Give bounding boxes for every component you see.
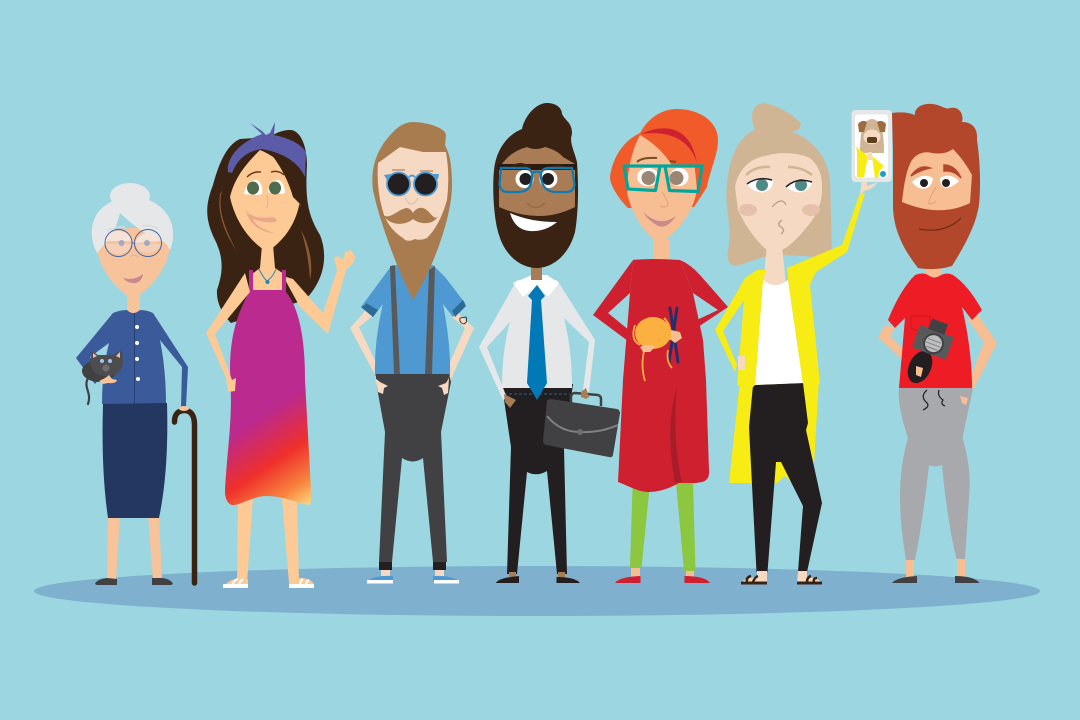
shirt and arms	[479, 280, 595, 400]
nose	[929, 187, 936, 204]
phone with selfie preview	[852, 110, 892, 182]
nose	[130, 255, 138, 257]
neck and chest	[252, 245, 284, 292]
sandals	[741, 576, 822, 584]
sneakers	[367, 576, 459, 581]
dress fold	[670, 387, 682, 483]
hair over forehead	[268, 150, 301, 205]
hair and beard	[493, 103, 578, 268]
eyebrows	[746, 167, 812, 175]
mustache	[383, 208, 438, 224]
shoes	[95, 578, 173, 585]
neck	[127, 296, 140, 316]
hair	[207, 130, 324, 323]
knitting needles	[669, 308, 678, 362]
hand on strap	[916, 366, 923, 377]
red dress	[618, 259, 709, 492]
collar	[513, 275, 559, 297]
eyebrows	[247, 171, 284, 177]
feet	[741, 571, 822, 582]
head	[97, 228, 170, 300]
eyes	[912, 176, 959, 189]
briefcase	[543, 393, 620, 457]
ankles	[509, 572, 565, 578]
eyes	[244, 180, 285, 195]
white top	[755, 280, 803, 385]
smile	[919, 218, 961, 230]
hair bun	[110, 183, 150, 209]
trousers	[376, 374, 451, 562]
sweat pants	[899, 388, 973, 560]
suspenders	[390, 266, 435, 375]
neck	[531, 264, 542, 280]
eyes	[516, 170, 558, 188]
left arm	[206, 273, 250, 392]
eyebrows	[637, 158, 676, 162]
dark brow bar	[498, 164, 577, 170]
sandals	[223, 578, 314, 588]
glasses	[105, 230, 162, 256]
trouser cuffs	[379, 562, 446, 570]
necklace	[259, 269, 276, 281]
ankles	[381, 570, 444, 576]
character: grandmother with cat and cane	[76, 183, 194, 585]
face	[378, 147, 448, 241]
hair red streak	[641, 128, 697, 163]
nose	[527, 203, 545, 208]
tie	[527, 285, 547, 400]
yarn ball	[633, 317, 672, 381]
hair and beard	[892, 104, 980, 269]
cane	[174, 410, 194, 583]
character: woman in gradient dress waving	[206, 122, 355, 588]
camera strap	[903, 347, 937, 387]
red t-shirt	[888, 274, 982, 388]
right sleeve	[680, 260, 728, 337]
hair back	[610, 109, 718, 208]
hair	[726, 103, 832, 266]
character: red-haired woman knitting	[593, 109, 728, 583]
face	[627, 134, 697, 244]
drawstrings	[923, 390, 945, 410]
shoes	[892, 576, 980, 583]
eyebrows	[392, 170, 433, 171]
ankles	[906, 559, 965, 578]
eyebrows	[512, 164, 568, 170]
hand in pocket	[960, 392, 970, 405]
raised arm	[283, 250, 355, 334]
mouth	[246, 210, 276, 233]
eyes	[637, 168, 688, 186]
cheeks	[739, 204, 757, 216]
hand on briefcase	[581, 388, 589, 399]
eyebrows	[911, 165, 961, 178]
hand holding cat	[99, 375, 117, 384]
neck	[653, 240, 670, 264]
face	[499, 147, 575, 216]
eyebrows	[107, 225, 158, 231]
left hand in pocket	[504, 394, 516, 408]
legs	[237, 498, 299, 583]
dress	[225, 270, 311, 505]
skirt	[103, 403, 167, 518]
teal glasses	[624, 166, 702, 192]
arms	[350, 308, 474, 388]
cat	[82, 350, 123, 404]
hands on hips	[375, 378, 449, 395]
nose	[266, 195, 268, 208]
slippers	[615, 576, 710, 583]
shoes	[496, 576, 580, 583]
tattoo	[460, 317, 467, 324]
shirt	[361, 265, 465, 376]
sweater	[76, 310, 188, 407]
character: bearded hipster with suspenders	[350, 122, 474, 584]
hands	[640, 330, 682, 352]
eyes	[747, 179, 812, 192]
neck	[926, 262, 942, 278]
kissing lips	[779, 220, 784, 234]
belt stitching	[504, 393, 570, 395]
sunglasses	[384, 172, 439, 196]
mouth	[123, 274, 143, 283]
hand on cane	[179, 406, 189, 411]
hair and beard	[372, 122, 452, 300]
character: businessman with glasses and briefcase	[479, 103, 620, 583]
nose	[772, 201, 786, 207]
left sleeve	[593, 260, 645, 350]
glasses	[500, 168, 574, 192]
camera	[912, 316, 957, 360]
character: blonde woman in yellow cardigan taking a selfie	[715, 103, 892, 584]
black trousers	[749, 383, 822, 572]
selfie hand	[860, 178, 878, 195]
neck and chest	[763, 245, 786, 285]
leggings	[630, 482, 696, 571]
legs	[107, 516, 162, 580]
character: bearded photographer with camera	[878, 104, 997, 583]
yellow cardigan	[715, 193, 865, 390]
arms	[878, 312, 997, 402]
hair highlights	[219, 170, 311, 280]
headband	[228, 122, 306, 177]
hand on hip	[738, 356, 745, 370]
nose	[660, 192, 668, 207]
face	[735, 153, 822, 250]
trousers	[502, 384, 573, 574]
hair	[92, 197, 173, 253]
ankles	[631, 568, 694, 577]
skirt of cardigan	[729, 380, 819, 483]
hair fringe	[640, 131, 703, 195]
face	[902, 149, 972, 210]
sleeve cuffs	[361, 300, 466, 317]
mouth	[643, 212, 676, 227]
smile	[510, 213, 557, 231]
sweater buttons	[135, 325, 140, 381]
nose	[405, 198, 418, 204]
ground shadow	[34, 566, 1040, 616]
face	[230, 150, 300, 252]
shirt pocket	[911, 316, 930, 332]
